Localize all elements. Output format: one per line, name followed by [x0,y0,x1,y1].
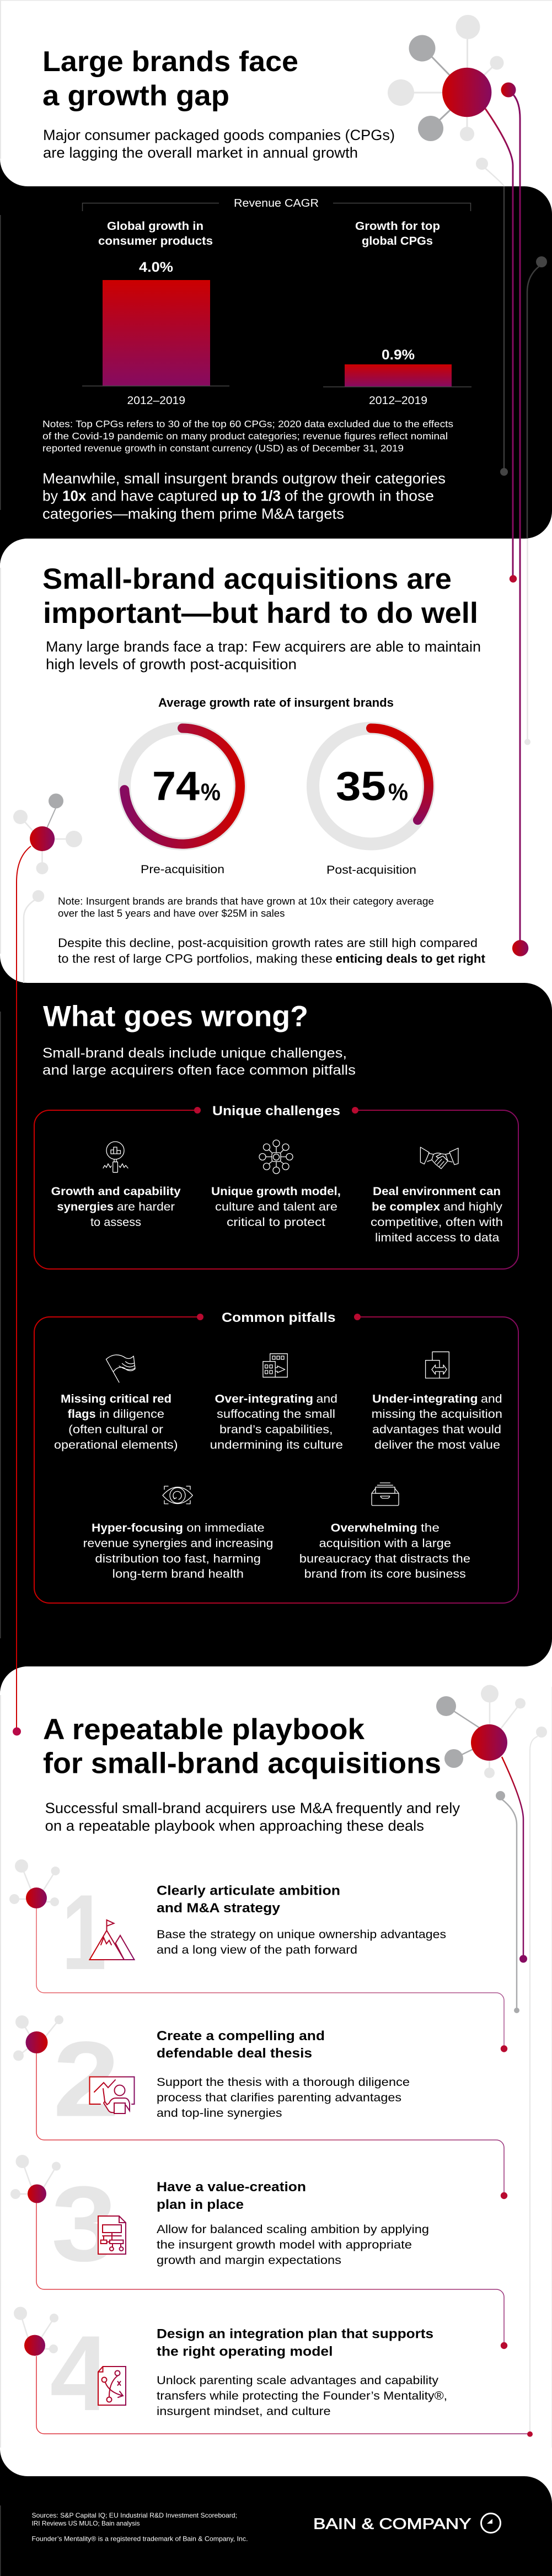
decoration: top molecule with connecting lines [388,15,547,956]
panel: what goes wrong [0,955,552,1694]
bar chart: growth for top global CPGs: 0.9% [382,347,415,363]
text: over-integrating: suffocating the small [217,1408,335,1421]
text: insurgent brands outgrow categories: Meanwhile, small insurgent brands outgrow their categories [42,470,446,487]
icon: archive box [372,1483,399,1505]
logo: Bain & Company: BAIN & COMPANY [313,2515,471,2532]
note: insurgent brands definition [58,895,434,919]
text: under-integrating [372,1392,502,1451]
text: enticing deals [58,936,485,966]
text: insurgent brands outgrow categories: up to 1/3 [221,487,281,504]
text: deal environment: competitive, often with [371,1216,503,1229]
text: missing critical red flags: (often cultural or [68,1423,163,1436]
donut chart: pre-acquisition 74%: % [201,778,221,806]
note: insurgent brands definition: over the last 5 years and have over $25M in sales [58,907,285,919]
step 3 text [157,2223,429,2267]
text: missing critical red flags [54,1392,178,1451]
chart header: revenue CAGR bracket: Revenue CAGR [234,197,319,209]
text: under-integrating: Under-integrating [372,1392,478,1406]
text: enticing deals: Despite this decline, post-acquisition growth rates are still high compared [58,936,478,950]
heading: repeatable playbook: for small-brand acquisitions [43,1747,441,1780]
step 3 text: growth and margin expectations [157,2254,341,2267]
step 4 text: Unlock parenting scale advantages and capability [157,2374,438,2387]
step 1 [62,1873,446,1992]
text: large brands trap: high levels of growth post-acquisition [46,656,297,673]
text: successful acquirers: on a repeatable playbook when approaching these deals [45,1817,424,1834]
step 4 title [157,2327,433,2359]
number 4: 4 [50,2314,109,2433]
text: growth and capability synergies: to assess [90,1216,141,1229]
text: insurgent brands outgrow categories: 10x [62,487,87,504]
heading: what goes wrong: What goes wrong? [43,1000,308,1033]
text: deal environment: Deal environment can [373,1185,501,1198]
text: over-integrating: and [317,1392,337,1406]
step 1 title: Clearly articulate ambition [157,1884,340,1899]
step 3 title [157,2180,306,2212]
panel: common pitfalls [34,1310,518,1603]
heading: small-brand acquisitions: important—but hard to do well [43,597,478,630]
step 2 text: Support the thesis with a thorough diligence [157,2075,410,2089]
intro text [43,127,395,161]
bar chart: global growth in consumer products: 2012–2019 [127,395,185,407]
chart notes: reported revenue growth in constant currency (USD) as of December 31, 2019 [42,443,404,454]
decoration: playbook molecule with connecting lines [436,1685,547,2434]
text: large brands trap [46,638,481,673]
text: missing critical red flags: Missing critical red [61,1392,172,1406]
text: unique growth model [211,1185,341,1229]
text: hyper-focusing [83,1521,273,1580]
icon: focused eye [163,1486,192,1504]
step 2 text: process that clarifies parenting advantages [157,2091,401,2104]
text: enticing deals: to the rest of large CPG portfolios, making these [58,951,333,966]
panel: repeatable playbook [0,1666,552,2476]
step 3 title: Have a value-creation [157,2180,306,2195]
heading: repeatable playbook: A repeatable playbook [43,1713,365,1746]
intro text: are lagging the overall market in annual growth [43,144,358,161]
step 2 [53,2020,410,2139]
text: successful acquirers: Successful small-brand acquirers use M&A frequently and rely [45,1800,460,1816]
text: overwhelming: brand from its core business [304,1568,466,1580]
text: unique growth model: Unique growth model, [211,1185,341,1198]
donut chart: post-acquisition 35%: % [388,778,408,806]
text: under-integrating: and [481,1392,502,1406]
intro text: Major consumer packaged goods companies (CPGs) [43,127,395,143]
chart header: revenue CAGR bracket [83,197,471,211]
text: over-integrating [210,1392,343,1451]
donut chart: post-acquisition 35%: 35 [336,763,386,809]
text: missing critical red flags: operational elements) [54,1439,178,1451]
title: large brands face a growth gap [42,46,298,112]
text: overwhelming: Overwhelming [331,1521,417,1534]
text: deal environment: limited access to data [375,1231,500,1244]
decoration: step 1 node and connector [9,1859,507,2052]
bar chart: growth for top global CPGs: Growth for top [355,220,440,233]
text: overwhelming: acquisition with a large [319,1537,451,1550]
text: overwhelming: bureaucracy that distracts the [299,1553,470,1566]
chart notes: Notes: Top CPGs refers to 30 of the top 60 CPGs; 2020 data excluded due to the effects [42,418,453,429]
step 3 text: the insurgent growth model with appropriate [157,2238,412,2251]
panel: footer [0,2449,552,2576]
text: insurgent brands outgrow categories: by [42,487,58,504]
icon: document with org chart [98,2216,126,2254]
bar chart: growth for top global CPGs: 2012–2019 [369,395,427,407]
text: hyper-focusing: Hyper-focusing [92,1521,183,1534]
decoration: step 2 node and connector [13,2015,507,2199]
note: insurgent brands definition: Note: Insurgent brands are brands that have grown at 10x their category average [58,895,434,907]
donut chart: pre-acquisition 74%: 74 [152,763,200,809]
text: hyper-focusing: on immediate [186,1521,265,1534]
number 2: 2 [53,2020,120,2139]
text: missing critical red flags: flags [68,1408,96,1421]
step 2 text: and top-line synergies [157,2106,282,2120]
text: unique challenges and pitfalls: Small-brand deals include unique challenges, [42,1045,347,1061]
step 2 title: Create a compelling and [157,2029,325,2043]
heading: repeatable playbook [43,1713,441,1780]
icon: presenter at board [89,2077,135,2113]
bar chart: growth for top global CPGs: global CPGs [362,235,433,248]
icon: buildings with arrow [263,1354,287,1377]
text: enticing deals: enticing deals to get right [335,951,485,966]
decoration: step 4 node and connector [14,2307,533,2437]
icon: playbook diagram [98,2367,126,2405]
step 1 text [157,1928,446,1956]
panel: revenue CAGR [0,159,552,566]
decoration: left molecule with connecting lines [13,794,82,1735]
bar chart: global growth in consumer products: 4.0% [139,260,173,275]
text: large brands trap: Many large brands face a trap: Few acquirers are able to maintain [46,638,481,655]
sources [32,2512,248,2543]
donut chart: post-acquisition 35%: Post-acquisition [326,864,416,876]
panel: large brands intro [0,0,552,186]
text: unique challenges and pitfalls: and large acquirers often face common pitfalls [42,1063,356,1078]
icon: magnifier with chart [103,1142,128,1173]
text: insurgent brands outgrow categories: of the growth in those [285,487,434,504]
text: hyper-focusing: distribution too fast, harming [95,1553,261,1566]
donut chart: pre-acquisition 74% [125,728,240,876]
logo: Bain & Company [313,2514,501,2532]
text: insurgent brands outgrow categories [42,470,446,522]
text: growth and capability synergies [51,1185,181,1229]
text: missing critical red flags: in diligence [99,1408,164,1421]
chart notes [42,418,453,454]
panel: small-brand acquisitions [0,539,552,983]
text: overwhelming: the [421,1521,440,1534]
step 4 text: insurgent mindset, and culture [157,2405,331,2418]
text: successful acquirers [45,1800,460,1834]
text: growth and capability synergies: synergies [57,1201,114,1213]
step 3 [51,2164,429,2284]
step 3 text: Allow for balanced scaling ambition by applying [157,2223,429,2236]
title: large brands face a growth gap: Large brands face [42,46,298,78]
step 4 [50,2314,447,2433]
text: hyper-focusing: revenue synergies and increasing [83,1537,273,1550]
donut chart: post-acquisition 35% [313,728,429,876]
icon: network [259,1140,293,1174]
bar chart: global growth in consumer products: Global growth in [107,220,203,233]
sources: Sources: S&P Capital IQ; EU Industrial R&D Investment Scoreboard; [32,2512,237,2519]
text: unique growth model: culture and talent are [215,1201,337,1213]
step 1 text: Base the strategy on unique ownership advantages [157,1928,446,1941]
text: insurgent brands outgrow categories: and have captured [91,487,217,504]
bar chart: growth for top global CPGs [323,220,471,407]
text: growth and capability synergies: are harder [117,1201,175,1213]
decoration: step 3 node and connector [10,2155,507,2349]
text: deal environment: be complex [372,1201,440,1213]
text: unique growth model: critical to protect [227,1216,325,1229]
step 2 title [157,2029,325,2061]
text: under-integrating: deliver the most value [374,1439,500,1451]
step 4 title: the right operating model [157,2344,333,2359]
text: over-integrating: Over-integrating [215,1392,313,1406]
chart notes: of the Covid-19 pandemic on many product categories; revenue figures reflect nominal [42,431,448,442]
text: growth and capability synergies: Growth and capability [51,1185,181,1198]
heading: common pitfalls: Common pitfalls [222,1310,335,1325]
panel: unique challenges [34,1104,518,1269]
step 2 text [157,2075,410,2120]
number 1: 1 [62,1873,106,1992]
text: over-integrating: undermining its culture [210,1439,343,1451]
heading: small-brand acquisitions [42,563,478,630]
sources: IRI Reviews US MULO; Bain analysis [32,2519,140,2527]
text: insurgent brands outgrow categories: categories—making them prime M&A targets [42,505,344,522]
icon: handshake [420,1147,458,1169]
donut chart: pre-acquisition 74%: Pre-acquisition [141,863,224,876]
step 4 title: Design an integration plan that supports [157,2327,433,2342]
text: hyper-focusing: long-term brand health [112,1568,244,1580]
text: unique challenges and pitfalls [42,1045,356,1078]
step 1 title [157,1884,340,1916]
bar chart: global growth in consumer products: consumer products [98,235,213,248]
step 4 text: transfers while protecting the Founder’s Mentality®, [157,2389,447,2402]
number 3: 3 [51,2164,117,2284]
text: under-integrating: advantages that would [372,1423,501,1436]
text: under-integrating: missing the acquisition [372,1408,502,1421]
chart title: average growth rate: Average growth rate of insurgent brands [158,696,394,709]
icon: flag [106,1355,135,1383]
heading: unique challenges: Unique challenges [212,1104,340,1118]
text: deal environment [371,1185,503,1244]
text: over-integrating: brand’s capabilities, [219,1423,333,1436]
bar chart: global growth in consumer products [82,220,229,407]
step 1 text: and a long view of the path forward [157,1943,357,1956]
heading: small-brand acquisitions: Small-brand acquisitions are [42,563,452,595]
step 2 title: defendable deal thesis [157,2046,312,2061]
step 4 text [157,2374,447,2418]
step 1 title: and M&A strategy [157,1901,280,1916]
text: deal environment: and highly [443,1201,503,1213]
title: large brands face a growth gap: a growth gap [42,80,229,112]
icon: overlapping documents [426,1352,449,1378]
step 3 title: plan in place [157,2197,244,2212]
text: overwhelming [299,1521,470,1580]
sources: Founder’s Mentality® is a registered trademark of Bain & Company, Inc. [32,2535,248,2543]
icon: mountain with flag [89,1920,135,1960]
